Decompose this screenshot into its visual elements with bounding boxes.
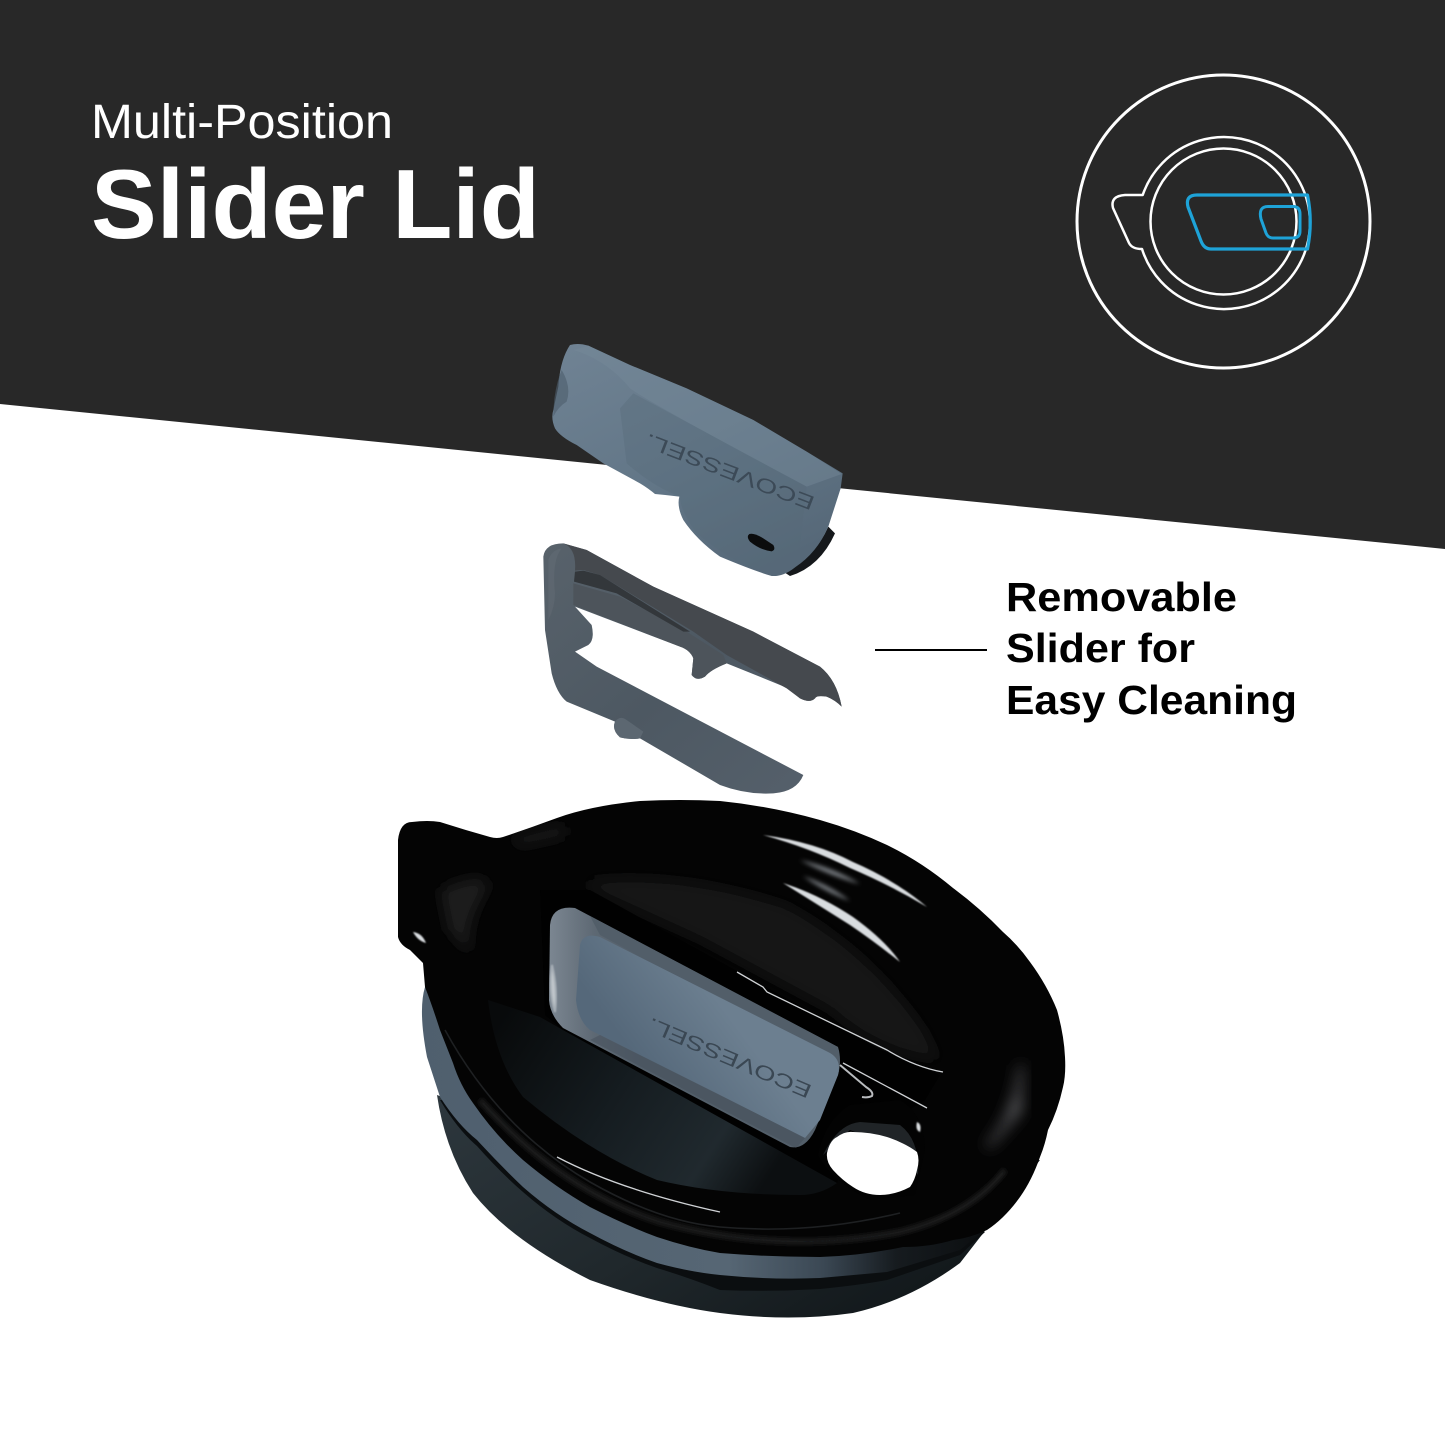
icon: slider opening (1260, 206, 1300, 238)
lid right rim sheen (987, 1065, 1021, 1147)
dark angled header panel (0, 0, 1445, 549)
slider cap part (552, 344, 843, 576)
embossed brand on lid slider: ECOVESSEL. (644, 1013, 815, 1102)
slider frame part (543, 543, 842, 794)
lid drink opening surround (818, 1100, 925, 1200)
icon: slider outline (1187, 195, 1310, 249)
lid blue seal band (422, 987, 985, 1279)
frame rail groove (574, 571, 690, 632)
embossed brand on cap: ECOVESSEL. (642, 428, 818, 514)
heading (91, 95, 540, 259)
frame inner rail (573, 583, 727, 679)
lid upper well shading (590, 878, 940, 1060)
slider cap underside (783, 527, 835, 576)
slider cap left crease (553, 370, 568, 417)
slider cap raised facet (573, 346, 842, 487)
icon: lid rim with spout (1112, 137, 1310, 309)
lid lower recess (488, 1000, 837, 1195)
heading line: Multi-Position: Multi-Position (91, 95, 393, 149)
frame silhouette (543, 543, 842, 794)
lid lower base (437, 1095, 1040, 1318)
lid slider window gloss (551, 965, 556, 1012)
lid channel black edge (540, 890, 940, 1183)
icon: outer circle (1077, 75, 1370, 368)
lid rim soft sheens (440, 825, 565, 955)
callout line 2: Slider for (1006, 625, 1195, 671)
lid gloss highlights (413, 835, 927, 1132)
frame left highlight (548, 548, 562, 620)
lid black groove (440, 1100, 985, 1291)
lid inner ring line (445, 1030, 900, 1229)
lid dim reflections (800, 860, 860, 901)
lid slider upper strip (590, 916, 838, 1060)
lid rim black (398, 800, 1065, 1257)
icon: lid inner ring (1150, 148, 1296, 294)
slider cap notch (748, 534, 774, 551)
frame top bar (563, 543, 842, 707)
lid slider visible cap (576, 936, 839, 1138)
lid hook glint (840, 1065, 872, 1097)
callout line 3: Easy Cleaning (1006, 677, 1297, 723)
lid slider window (549, 908, 840, 1147)
lid fine glints (557, 972, 943, 1212)
lid drink opening hole (827, 1132, 918, 1195)
callout leader line (875, 649, 987, 651)
frame clip tab (614, 718, 643, 739)
callout line 1: Removable (1006, 574, 1237, 620)
heading line: Slider Lid: Slider Lid (91, 149, 540, 259)
lid slider lower strip shade (590, 1035, 805, 1148)
slider cap shaded lower facet (620, 393, 807, 576)
lid drink opening lip (823, 1122, 918, 1175)
slider cap body (552, 344, 843, 576)
lid base part (398, 800, 1065, 1318)
icon: lid top view with slider highlighted (1077, 75, 1370, 368)
callout text (1006, 574, 1297, 723)
lid lower rim sheen (480, 1100, 1005, 1241)
